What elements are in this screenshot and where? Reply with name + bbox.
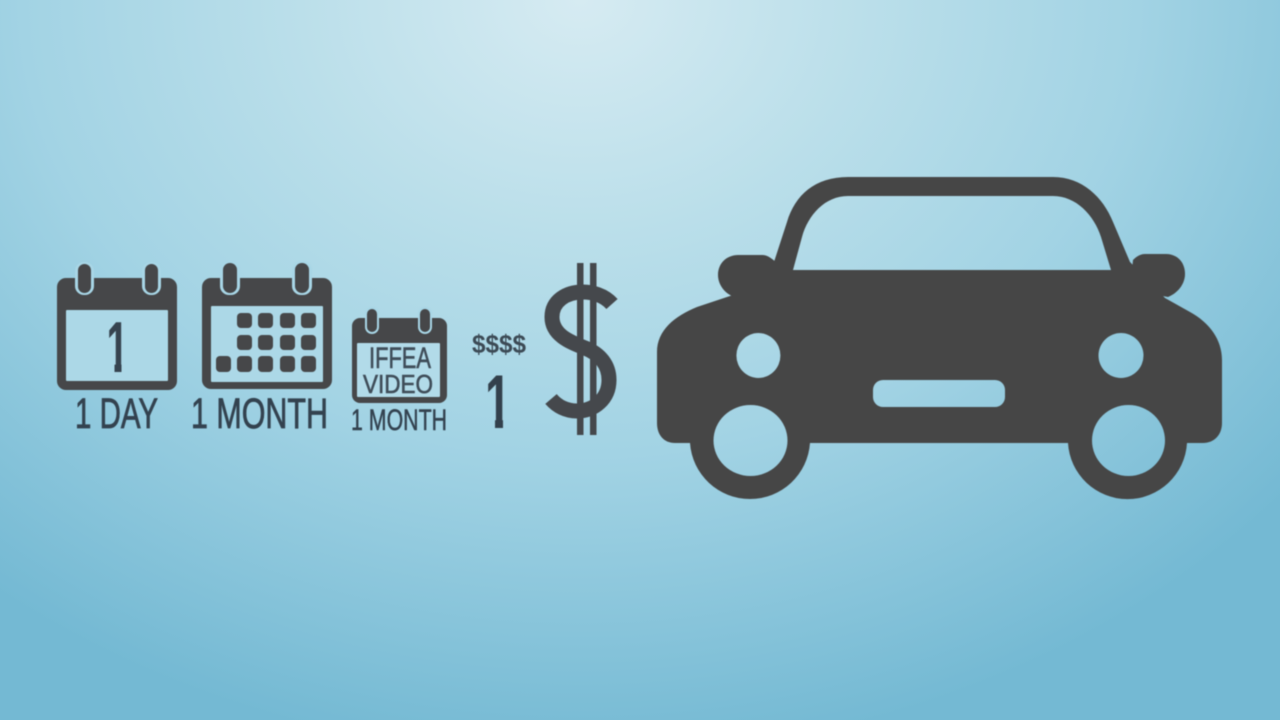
icon: small calendar with text: VIDEO <box>363 369 433 399</box>
right mirror <box>1130 254 1185 297</box>
icon: large dollar sign <box>551 263 612 435</box>
small dollar signs: $$$$ <box>472 329 527 359</box>
icon: car front view <box>657 177 1222 499</box>
numeral 1: 1 <box>485 360 511 445</box>
icon: small calendar with text: IFFEA <box>369 342 431 375</box>
icon: month calendar with date grid <box>202 261 332 389</box>
left mirror <box>718 255 776 297</box>
label: 1 day: 1 DAY <box>75 390 158 438</box>
icon: small calendar with text <box>352 307 447 403</box>
icon: one day calendar <box>57 262 177 390</box>
icon: one day calendar: 1 <box>106 308 128 388</box>
label: 1 month: 1 MONTH <box>191 390 328 438</box>
car body with windshield, headlights and grille <box>657 177 1222 499</box>
label: small 1 month: 1 MONTH <box>351 404 447 437</box>
